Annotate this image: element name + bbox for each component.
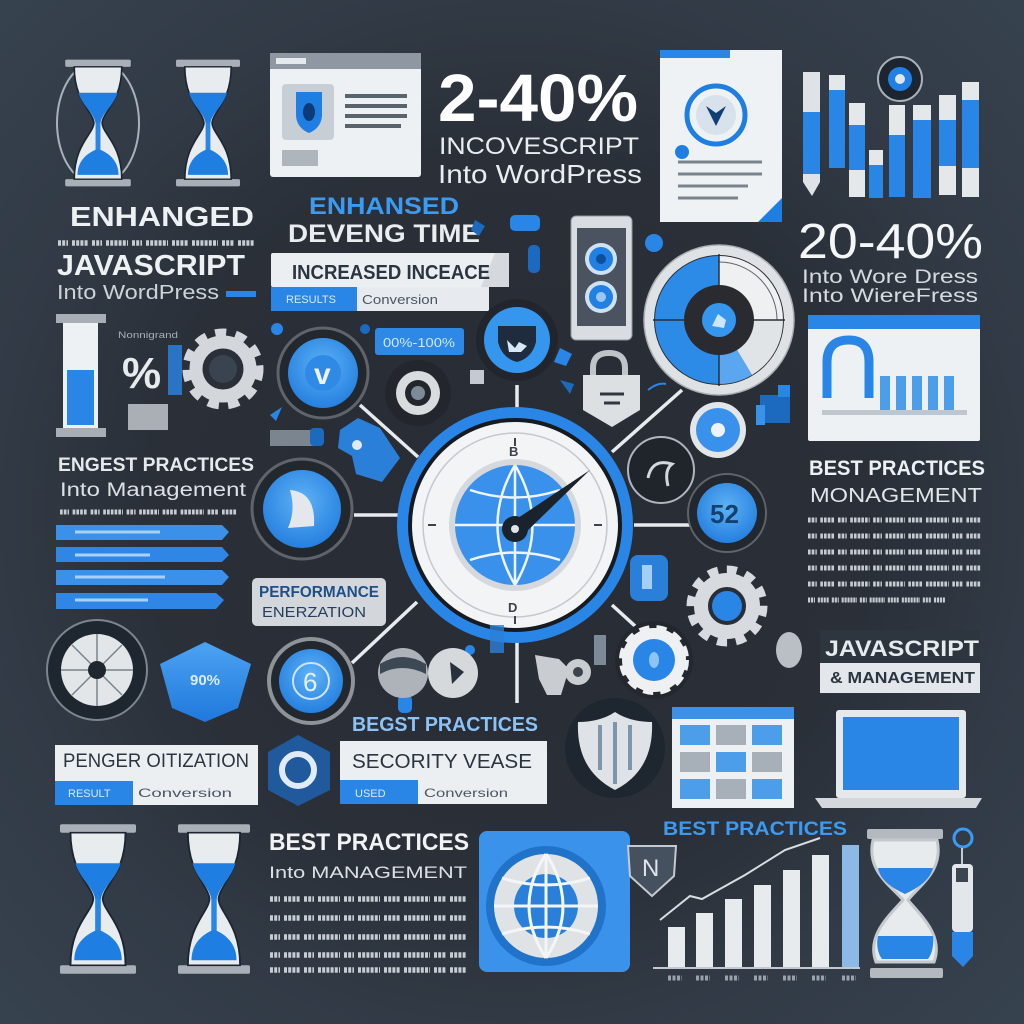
icon: hourglass with orbit top left xyxy=(57,60,139,186)
icon: gear right xyxy=(691,570,763,642)
icon: shield hexagon 90%: 90% xyxy=(190,672,220,689)
list: blue arrow bars xyxy=(56,525,229,609)
label: security vease: SECORITY VEASE xyxy=(352,751,532,773)
icon: hourglass bottom left second xyxy=(178,824,250,974)
label: increased increase: INCREASED INCEACE xyxy=(292,262,490,284)
label: small blue tag: 00%-100% xyxy=(383,335,455,350)
central clock dial: D xyxy=(508,600,517,615)
panel: dashboard chart right xyxy=(808,315,980,441)
heading: Incovescript into WordPress: INCOVESCRIPT xyxy=(439,133,639,160)
icon: target small xyxy=(385,360,451,426)
icon: circle badge v: v xyxy=(314,358,331,391)
heading: engest practices xyxy=(58,455,254,512)
icon: small circle outline right of clock xyxy=(690,402,746,458)
icon: small shield bottom: N xyxy=(642,855,659,882)
icon: circle badge v xyxy=(278,328,368,418)
icon: target gauge lower left xyxy=(47,620,147,720)
heading: Enhanced deving time: ENHANSED xyxy=(309,193,459,220)
icon: shield hexagon 90% xyxy=(160,642,251,722)
connector spokes from central clock xyxy=(352,385,690,703)
label: performance enhancement: PERFORMANCE xyxy=(259,584,379,601)
text: best practices management right: MONAGEMENT xyxy=(810,485,982,507)
text: small caption and into WordPress xyxy=(57,243,256,304)
text: percent card: % xyxy=(122,349,161,398)
label: penger optimization xyxy=(55,745,258,805)
heading: 20-40% right: Into WiereFress xyxy=(802,286,978,307)
heading: 2-40%: 2-40% xyxy=(438,61,638,136)
text: percent card xyxy=(118,330,182,430)
text: small caption and into WordPress: Into WordPress xyxy=(57,282,219,304)
heading: Enhanced deving time xyxy=(288,193,480,248)
label: JavaScript management: & MANAGEMENT xyxy=(830,670,975,687)
panel: blue globe tile xyxy=(479,831,630,972)
heading: Enhanced JavaScript: ENHANGED xyxy=(70,201,254,232)
icon: small shield bottom xyxy=(628,846,676,896)
label: penger optimization: PENGER OITIZATION xyxy=(63,751,249,772)
label: JavaScript management xyxy=(820,630,980,694)
icon: blue hexagon ring xyxy=(268,735,330,806)
label: penger optimization: RESULT xyxy=(68,788,111,800)
heading: best practices bottom xyxy=(269,829,469,882)
text: best practices management right: BEST PRACTICES xyxy=(809,457,985,480)
icon: circle badge left middle xyxy=(252,459,352,559)
icon: hourglass bottom right xyxy=(867,829,943,978)
icon: smartphone xyxy=(571,216,632,340)
label: security vease: Conversion xyxy=(424,786,508,800)
icon: small blue tiles xyxy=(630,555,802,668)
chart: vertical bars top right xyxy=(803,57,979,198)
icon: hourglass bottom left xyxy=(60,824,136,974)
chart: donut gauge xyxy=(644,245,794,395)
heading: best practices bottom: BEST PRACTICES xyxy=(269,829,469,856)
icon: top circle mask xyxy=(476,299,558,381)
icon: test tube bottom right xyxy=(952,829,973,967)
heading: 20-40% right: 20-40% xyxy=(798,215,983,269)
heading: engest practices: Into Management xyxy=(60,480,247,501)
panel: browser window top xyxy=(270,53,421,177)
panel: table grid xyxy=(672,707,794,808)
heading: Enhanced deving time: DEVENG TIME xyxy=(288,220,480,248)
heading: best practices blue bottom right: BEST PRACTICES xyxy=(663,819,847,840)
icon: media cluster xyxy=(378,625,606,698)
icon: circle badge bottom left center xyxy=(269,639,353,723)
heading: best practices bottom: Into MANAGEMENT xyxy=(269,863,467,882)
central clock dial: B xyxy=(509,444,518,459)
text block bottom xyxy=(270,899,466,970)
heading: Incovescript into WordPress xyxy=(438,133,642,189)
icon: hourglass top left second xyxy=(176,60,240,186)
heading: 20-40% right xyxy=(798,215,983,307)
icon: S2 badge: 52 xyxy=(710,499,739,529)
icon: circle badge bottom left center: 6 xyxy=(303,667,317,697)
label: security vease xyxy=(340,741,547,804)
chart: rising bars bottom xyxy=(653,838,860,978)
label: best practices blue: BEGST PRACTICES xyxy=(352,714,538,736)
icon: shield xyxy=(565,698,665,798)
heading: engest practices: ENGEST PRACTICES xyxy=(58,455,254,476)
panel: document with badge xyxy=(660,50,782,222)
text: best practices management right xyxy=(808,457,985,600)
text: percent card: Nonnigrand xyxy=(118,330,178,340)
heading: Incovescript into WordPress: Into WordPress xyxy=(438,159,642,189)
heading: 20-40% right: Into Wore Dress xyxy=(802,267,978,288)
central clock dial xyxy=(397,407,633,643)
label: performance enhancement xyxy=(252,578,386,626)
label: JavaScript management: JAVASCRIPT xyxy=(825,636,980,661)
icon: S2 badge xyxy=(688,474,766,552)
icon: sketch circle xyxy=(628,437,694,503)
label: penger optimization: Conversion xyxy=(138,786,232,800)
label: increased increase: Conversion xyxy=(362,292,438,307)
icon: progress tube left xyxy=(56,314,106,437)
heading: Enhanced JavaScript: JAVASCRIPT xyxy=(57,250,245,282)
icon: padlock xyxy=(583,353,640,427)
icon: gear left xyxy=(187,333,259,405)
label: increased increase: RESULTS xyxy=(286,294,336,306)
label: performance enhancement: ENERZATION xyxy=(262,604,366,621)
label: security vease: USED xyxy=(355,788,386,800)
icon: gear target right of clock xyxy=(615,621,693,699)
label: small blue tag xyxy=(375,328,464,355)
label: increased increase xyxy=(271,253,509,311)
heading: Enhanced JavaScript xyxy=(57,201,254,282)
decorative small icon cluster xyxy=(270,215,790,713)
icon: laptop xyxy=(815,710,982,808)
